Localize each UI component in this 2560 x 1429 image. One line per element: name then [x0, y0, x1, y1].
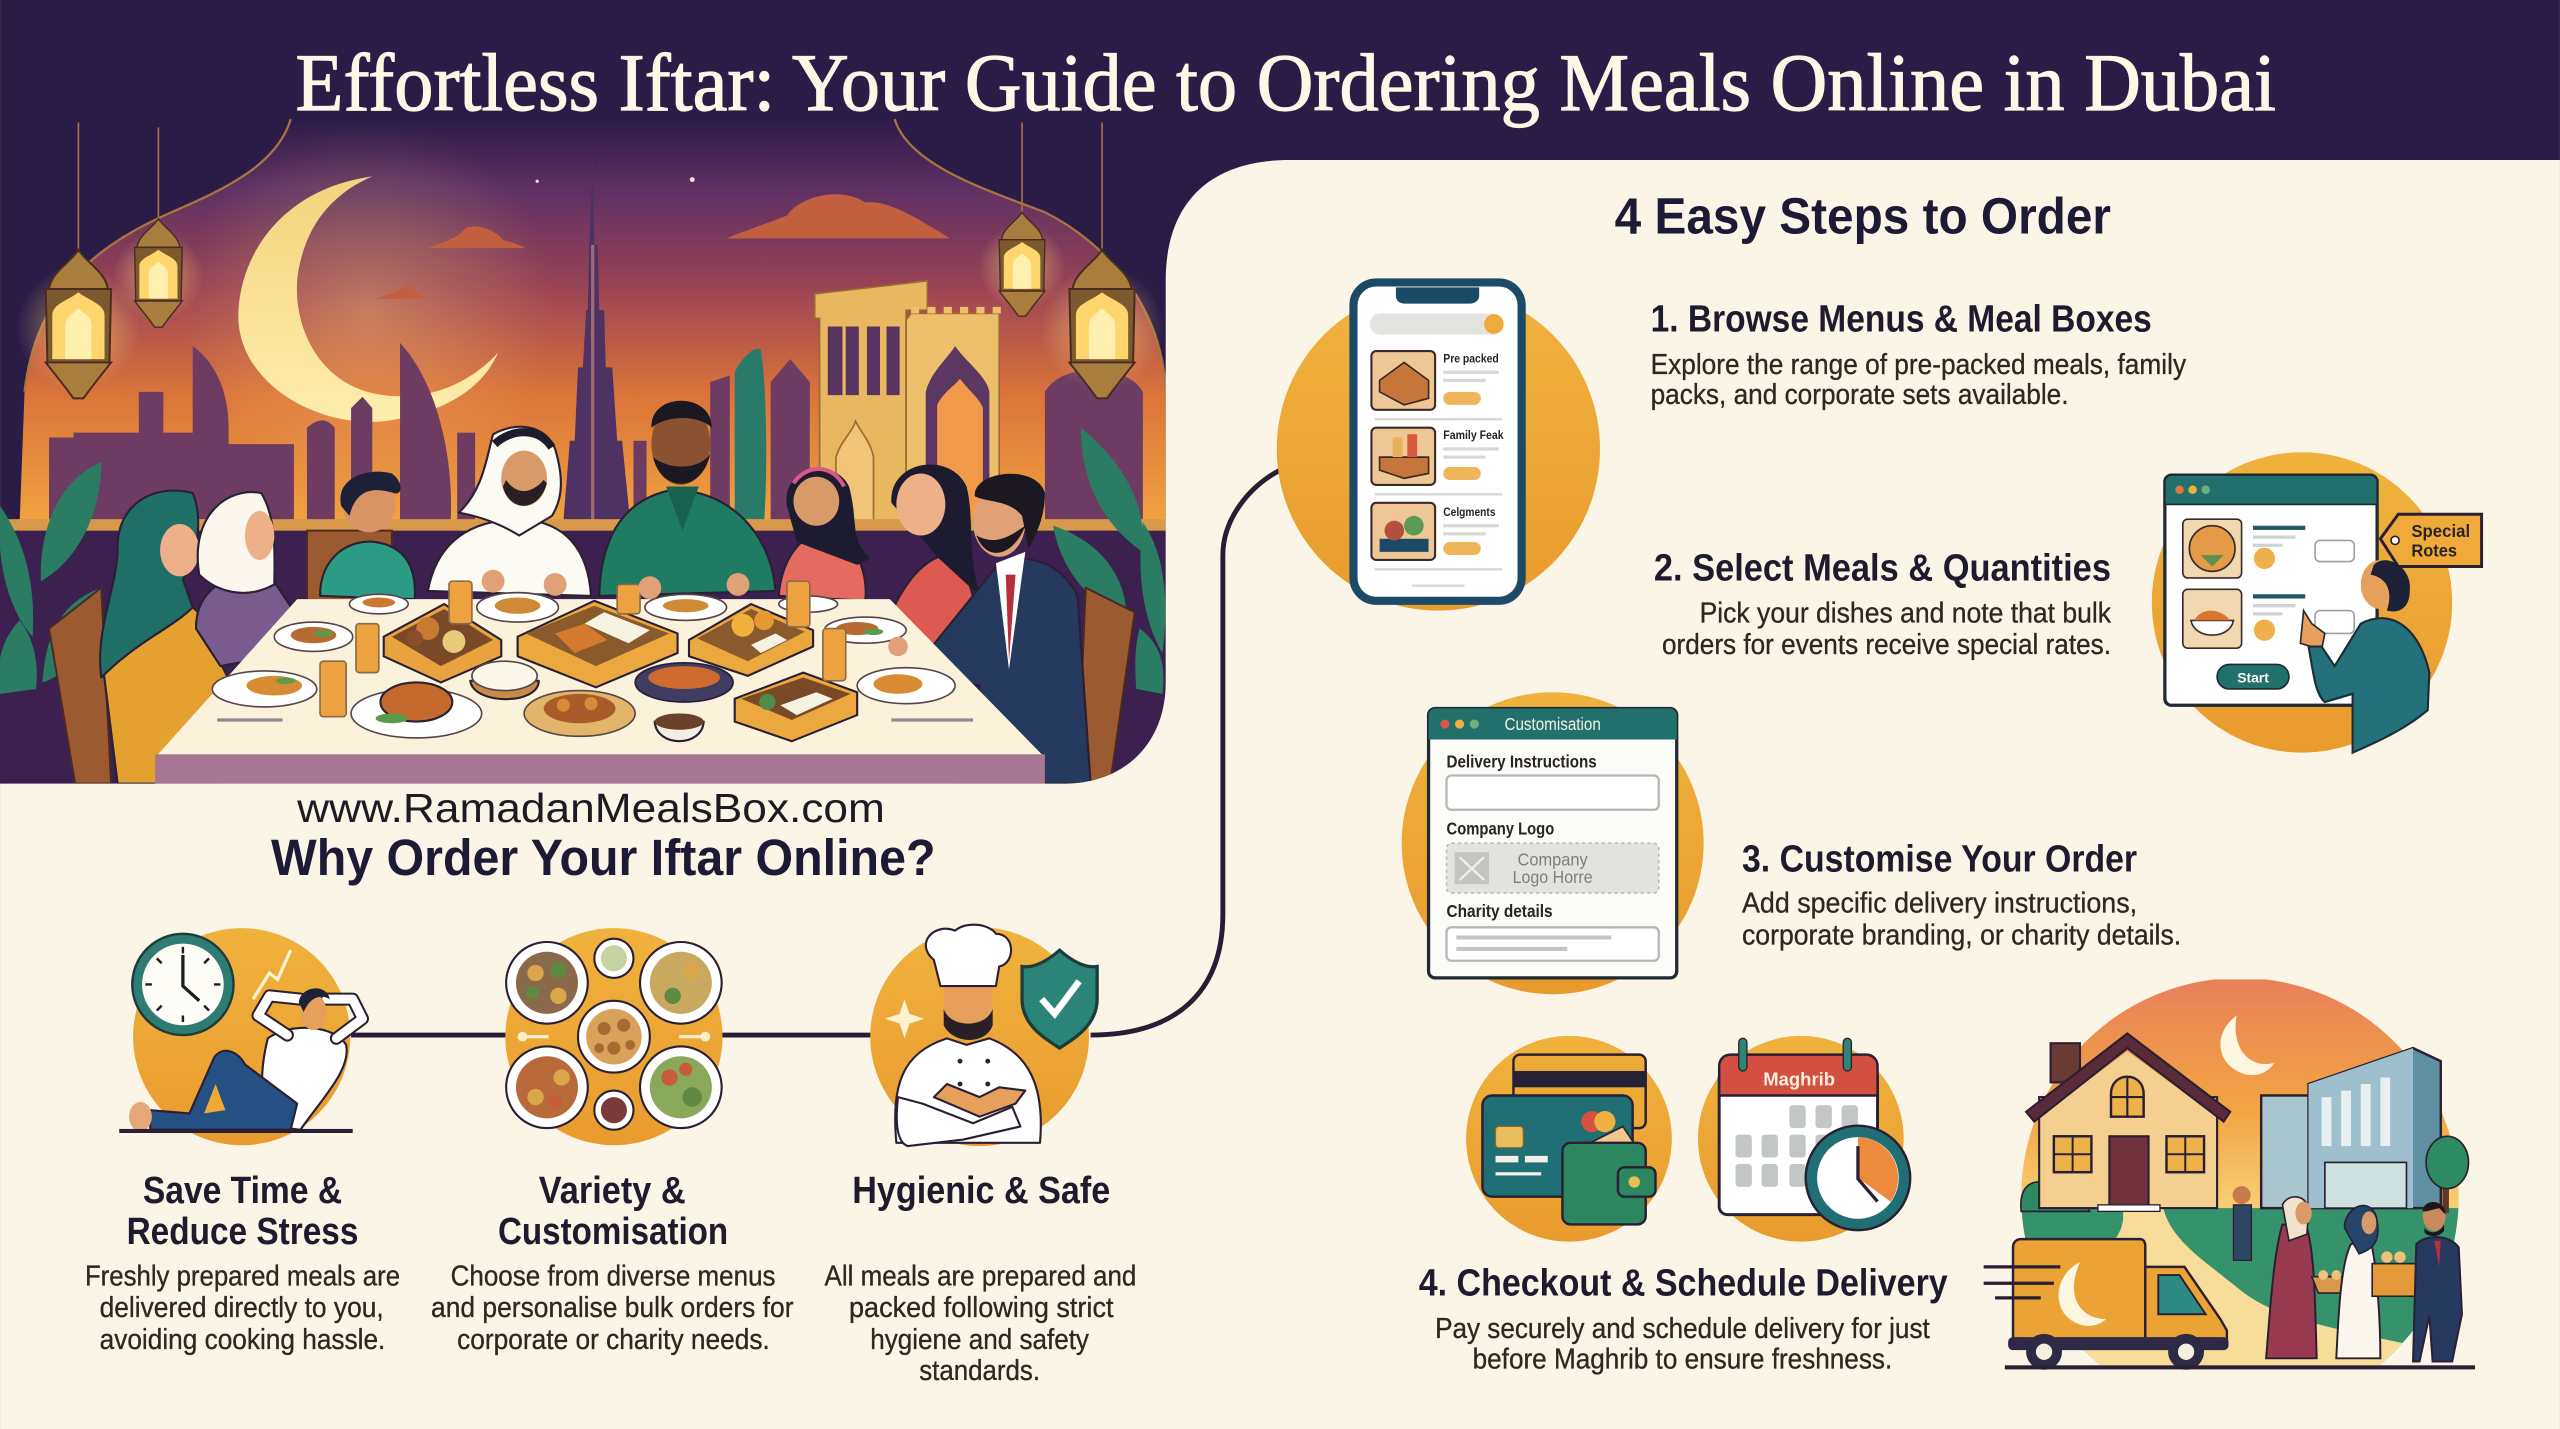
title: Effortless Iftar: Your Guide to Ordering Meals Online in Dubai [296, 37, 2276, 128]
icon: phone with menus [1277, 282, 1600, 611]
icon: web window and person: Rotes [2411, 541, 2457, 561]
description: corporate or charity needs. [457, 1324, 770, 1356]
description: and personalise bulk orders for [431, 1292, 794, 1324]
gift box [2372, 1251, 2416, 1296]
description [1742, 888, 2181, 951]
illustration: delivery scene [1984, 978, 2475, 1371]
heading: 2. Select Meals & Quantities [1654, 547, 2111, 589]
person: woman in teal hijab [100, 491, 296, 784]
heading line 2: Customisation [498, 1210, 728, 1252]
description: delivered directly to you, [100, 1292, 384, 1324]
step 1: browse [1277, 282, 2187, 611]
Burj Khalifa [563, 152, 630, 522]
curry dish [524, 691, 635, 736]
heritage fort and gate [815, 281, 1001, 522]
heading: Save Time & [143, 1169, 342, 1211]
palm leaves right [1053, 428, 1165, 694]
heading: 4. Checkout & Schedule Delivery [1419, 1261, 1948, 1303]
icon: relaxing man and clock [119, 928, 362, 1145]
person: boy in teal [320, 472, 415, 599]
benefit 1: save time [85, 928, 400, 1356]
icon: web window and person: Start [2237, 669, 2269, 685]
description: hygiene and safety [870, 1324, 1090, 1356]
meal box 4 [735, 673, 857, 741]
man in suit [2413, 1202, 2462, 1362]
icon: calendar and clock [1698, 1036, 1910, 1242]
person: man in navy suit [911, 474, 1091, 784]
heading: Variety & [539, 1169, 686, 1211]
description: Freshly prepared meals are [85, 1261, 400, 1293]
icon: plates of food [505, 928, 722, 1145]
description [1651, 349, 2187, 411]
crescent moon [238, 176, 498, 422]
icon: customisation form: Company [1518, 849, 1588, 869]
description: orders for events receive special rates. [1662, 629, 2111, 661]
person: girl in pink [779, 469, 870, 601]
plates [212, 593, 955, 707]
delivery van [1984, 1239, 2229, 1370]
description: standards. [919, 1355, 1040, 1387]
vegetable bowl [635, 663, 733, 702]
icon: customisation form: Logo Horre [1513, 867, 1593, 887]
meal box 3 [689, 604, 813, 676]
description: packed following strict [849, 1292, 1114, 1324]
step 4: checkout [1419, 978, 2475, 1375]
description [825, 1261, 1136, 1387]
chairs [49, 531, 1135, 784]
ground line [2005, 1365, 2475, 1369]
twisted tower [735, 349, 766, 522]
stars [536, 177, 695, 183]
person: man in white kandura [428, 427, 591, 596]
woman in maroon [2266, 1197, 2317, 1358]
description: before Maghrib to ensure freshness. [1473, 1343, 1892, 1375]
chicken platter [351, 682, 482, 738]
description: avoiding cooking hassle. [100, 1324, 385, 1356]
rice bowl [470, 661, 539, 699]
heading: why order online: Why Order Your Iftar Online? [271, 828, 936, 886]
person: woman in red [882, 464, 980, 661]
meal box 1 [384, 604, 501, 682]
description: Pick your dishes and note that bulk [1700, 598, 2112, 630]
description: Explore the range of pre-packed meals, family [1651, 349, 2187, 381]
juice glasses [320, 581, 846, 717]
meal box 2 [518, 601, 678, 687]
description [1435, 1313, 1930, 1375]
woman in white [2336, 1206, 2380, 1358]
sauce cup [655, 713, 704, 741]
heading: Hygienic & Safe [852, 1169, 1110, 1211]
benefit 3: hygienic [825, 925, 1136, 1387]
hands and cutlery [217, 570, 973, 720]
benefit 2: variety [431, 928, 794, 1356]
description: Add specific delivery instructions, [1742, 888, 2137, 920]
skyline silhouettes [49, 343, 1143, 539]
description: Choose from diverse menus [451, 1261, 776, 1293]
lantern far left [16, 122, 140, 398]
heading: 4 easy steps: 4 Easy Steps to Order [1615, 186, 2111, 244]
icon: web window and person [2152, 452, 2482, 753]
terrace wall and railing [0, 531, 1166, 784]
connector line [351, 470, 1280, 1035]
description: All meals are prepared and [825, 1261, 1136, 1293]
website url: www.RamadanMealsBox.com [296, 785, 885, 831]
icon: phone with menus: Family Feak [1443, 428, 1504, 442]
step 2: select [1654, 452, 2482, 753]
lantern right [979, 122, 1065, 316]
icon: web window and person: Special [2411, 521, 2470, 541]
icon: phone with menus: Celgments [1443, 505, 1496, 519]
description: corporate branding, or charity details. [1742, 919, 2181, 951]
arch window sky [10, 119, 1166, 784]
description [431, 1261, 794, 1356]
step 3: customise [1402, 692, 2181, 994]
description: Pay securely and schedule delivery for just [1435, 1313, 1930, 1345]
food tray [2312, 1270, 2348, 1293]
tree [2426, 1136, 2469, 1213]
moon glow [180, 122, 555, 498]
icon: customisation form: Company Logo [1447, 818, 1554, 838]
icon: cards and wallet [1466, 1036, 1672, 1242]
heading line 2: Reduce Stress [127, 1210, 358, 1252]
lantern far right [1040, 122, 1164, 398]
house [2026, 1033, 2230, 1211]
icon: customisation form: Customisation [1504, 714, 1601, 734]
icon: customisation form: Charity details [1447, 901, 1553, 921]
heading: 1. Browse Menus & Meal Boxes [1651, 297, 2152, 339]
clouds [376, 194, 950, 299]
person in background [2233, 1186, 2251, 1260]
bushes [2021, 1182, 2090, 1211]
icon: calendar and clock: Maghrib [1763, 1069, 1835, 1090]
description: packs, and corporate sets available. [1651, 379, 2069, 411]
icon: phone with menus: Pre packed [1443, 351, 1499, 365]
person: man in green [599, 401, 776, 596]
description [1662, 598, 2112, 661]
illustration: family iftar over Dubai skyline [0, 119, 1166, 784]
building [2261, 1048, 2441, 1208]
arch outline [25, 119, 1166, 392]
icon: customisation form: Delivery Instructions [1447, 751, 1597, 771]
crescent [2220, 1015, 2274, 1075]
table with cloth [155, 599, 1045, 784]
heading: 3. Customise Your Order [1742, 837, 2137, 879]
sky and grass [2021, 978, 2462, 1371]
palm leaves left [0, 462, 101, 694]
icon: customisation form [1402, 692, 1704, 994]
lantern left [113, 127, 204, 327]
description [85, 1261, 400, 1356]
person: girl in white hijab [196, 492, 302, 666]
icon: chef and shield [870, 925, 1097, 1146]
